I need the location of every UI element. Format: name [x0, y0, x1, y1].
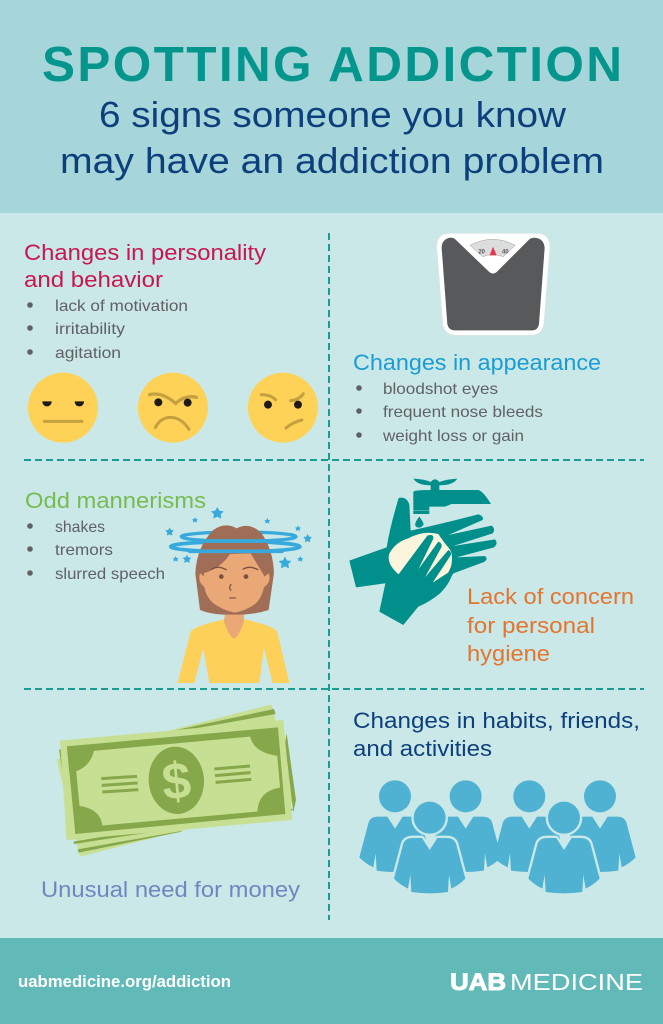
header banner	[0, 0, 663, 213]
heading: appearance: Changes in appearance	[353, 350, 601, 375]
icon: hands washing under faucet	[349, 479, 497, 625]
logo: UAB Medicine	[450, 969, 643, 996]
logo: UAB Medicine: MEDICINE	[510, 969, 643, 995]
list: personality signs: irritability	[55, 321, 125, 338]
icon: stack of dollar bills: $	[160, 751, 193, 811]
icon: stack of dollar bills	[57, 704, 296, 857]
icon: dizzy woman	[165, 507, 312, 683]
heading: personality: Changes in personality	[24, 240, 267, 265]
list: appearance signs: bloodshot eyes	[383, 381, 498, 398]
logo: UAB Medicine: UAB	[450, 969, 506, 996]
heading: hygiene: hygiene	[467, 641, 550, 666]
panel: personality and behavior	[24, 240, 318, 443]
icon: bathroom scale: 40	[502, 249, 509, 255]
heading: personality: and behavior	[24, 267, 164, 292]
heading: hygiene: Lack of concern	[467, 584, 634, 609]
title: SPOTTING ADDICTION	[42, 37, 622, 92]
panel: habits	[353, 708, 640, 893]
panel: appearance	[353, 233, 601, 445]
list: mannerism signs: slurred speech	[55, 566, 165, 583]
list: appearance signs	[356, 381, 543, 445]
list: personality signs: lack of motivation	[55, 298, 188, 315]
icon: bathroom scale	[437, 233, 550, 335]
icon: neutral face	[28, 373, 98, 443]
list: personality signs	[27, 298, 188, 362]
icon: group of people	[359, 780, 636, 893]
footer url: uabmedicine.org/addiction	[18, 973, 231, 991]
list: mannerism signs	[27, 519, 165, 583]
list: appearance signs: weight loss or gain	[382, 428, 524, 445]
caption: money: Unusual need for money	[41, 877, 301, 902]
heading: habits: and activities	[353, 736, 492, 761]
icon: bathroom scale: 20	[478, 249, 486, 255]
list: personality signs: agitation	[55, 345, 121, 362]
panel: money	[41, 704, 301, 902]
icon: angry face	[138, 373, 208, 443]
list: mannerism signs: tremors	[55, 542, 113, 559]
list: mannerism signs: shakes	[55, 519, 105, 536]
panel: hygiene	[349, 479, 634, 666]
subtitle: 6 signs someone you know	[99, 94, 567, 135]
heading: habits: Changes in habits, friends,	[353, 708, 640, 733]
heading: hygiene: for personal	[467, 613, 595, 638]
footer bar	[0, 938, 663, 1024]
panel: odd mannerisms	[25, 488, 312, 683]
heading: mannerisms: Odd mannerisms	[25, 488, 206, 513]
icon: skeptical face	[248, 373, 318, 443]
subtitle: may have an addiction problem	[60, 140, 604, 181]
list: appearance signs: frequent nose bleeds	[383, 404, 543, 421]
